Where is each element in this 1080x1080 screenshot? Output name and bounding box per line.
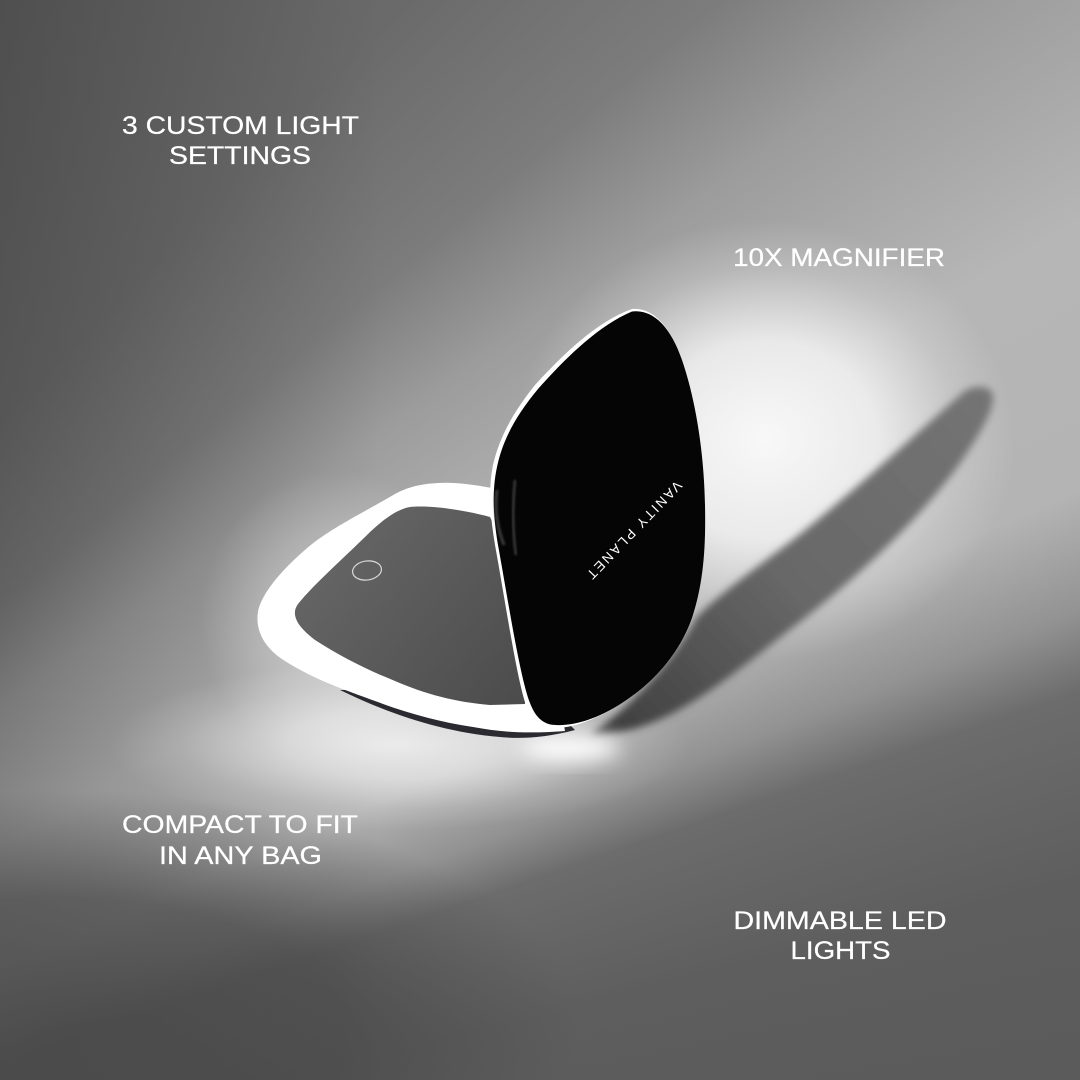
cast shadow of mirror bbox=[590, 387, 993, 735]
callout: dimmable LED lights: DIMMABLE LED bbox=[734, 907, 946, 935]
black mirror lid with white rim bbox=[490, 309, 705, 728]
mirror base white LED ring bbox=[257, 483, 565, 732]
mirror grey magnifier surface bbox=[295, 507, 530, 705]
callout: compact to fit in any bag: COMPACT TO FIT bbox=[122, 811, 358, 839]
callout: 3 custom light settings: 3 CUSTOM LIGHT bbox=[122, 112, 359, 140]
callout: 3 custom light settings: SETTINGS bbox=[169, 142, 311, 170]
callout: 10x magnifier: 10X MAGNIFIER bbox=[733, 244, 945, 272]
touch button ring bbox=[351, 559, 383, 582]
mirror base dark edge bbox=[340, 690, 575, 738]
callout: dimmable LED lights: LIGHTS bbox=[790, 937, 890, 965]
compact mirror bbox=[257, 309, 705, 738]
brand text: VANITY PLANET bbox=[582, 478, 685, 583]
glow under mirror bbox=[520, 735, 620, 761]
callout: compact to fit in any bag: IN ANY BAG bbox=[159, 842, 322, 870]
lid hinge reflection bbox=[496, 480, 516, 555]
